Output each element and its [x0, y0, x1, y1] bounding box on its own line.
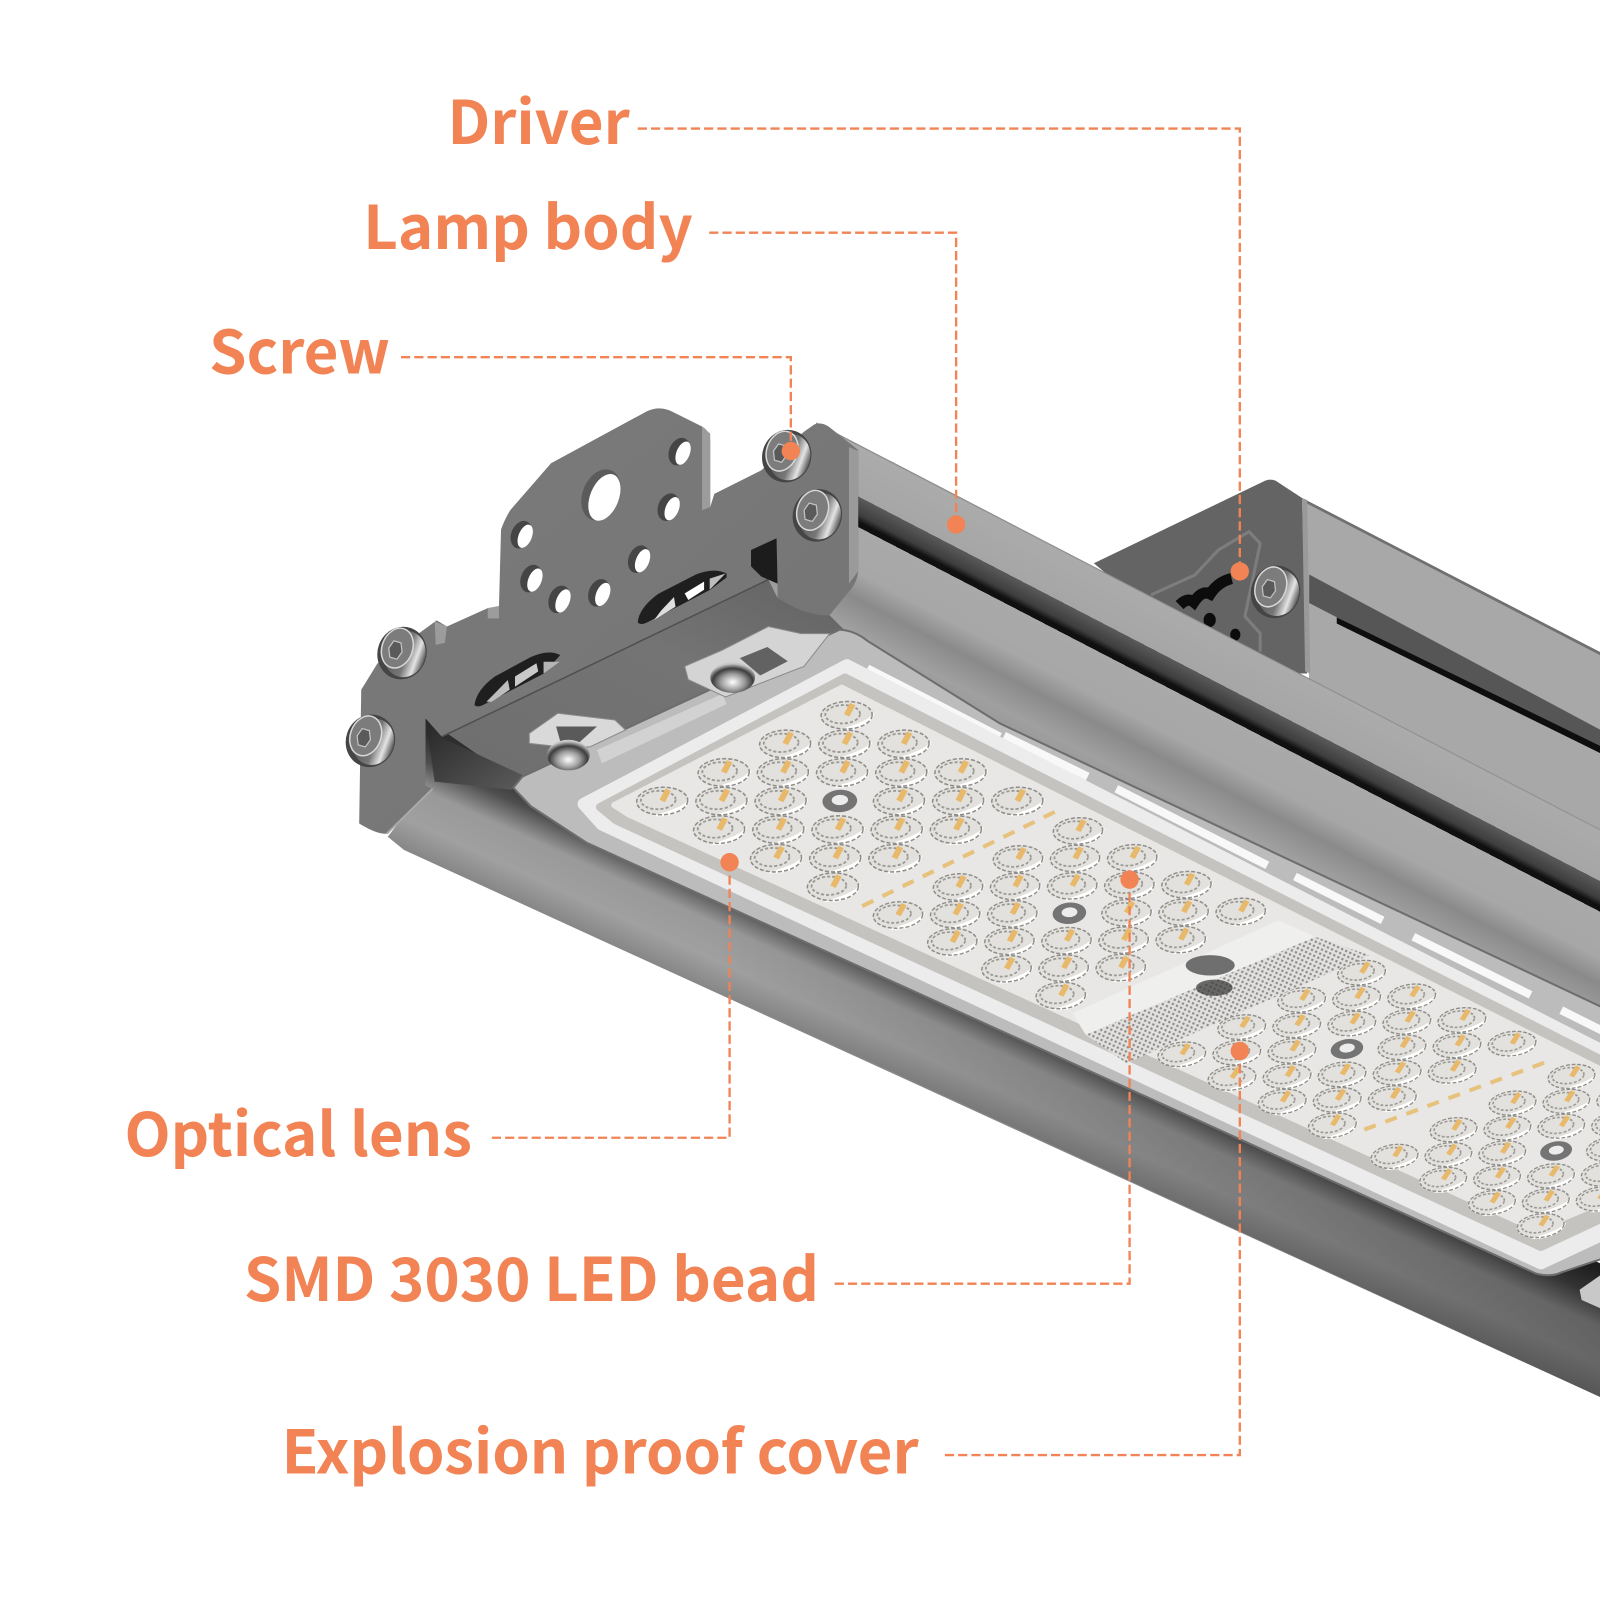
leader: LED bead: [834, 870, 1139, 1284]
leader: screw: [401, 357, 800, 460]
screw lower left: [338, 708, 402, 774]
LED module 4: [1352, 1058, 1600, 1245]
label: SMD 3030 LED bead: SMD 3030 LED bead: [244, 1232, 819, 1319]
right slot: [638, 571, 727, 624]
LED board: [614, 688, 1600, 1230]
left mounting clip: [529, 713, 626, 770]
LED module 1: [628, 701, 1053, 902]
LED module 3: [1140, 954, 1555, 1145]
lens rim: [584, 665, 1600, 1263]
label: driver: Driver: [447, 75, 631, 162]
lamp illustration: [338, 408, 1600, 1431]
large mounting hole: [574, 463, 628, 526]
sensor board section: [1072, 920, 1369, 1063]
label: explosion proof cover: Explosion proof cover: [282, 1404, 920, 1491]
screw upper left: [370, 620, 434, 686]
screw top right: [755, 423, 819, 489]
screw rear unit: [1243, 559, 1308, 625]
driver vents: [1180, 579, 1240, 641]
leader: driver: [638, 129, 1249, 581]
label: lamp body: Lamp body: [363, 180, 693, 267]
bracket notch: [751, 538, 778, 584]
lower body face: [388, 718, 1600, 1431]
screw right: [785, 482, 849, 549]
mounting bracket and end plates: [359, 408, 858, 834]
left slot: [474, 652, 560, 706]
lens inner frame: [600, 678, 1600, 1247]
module seams: [862, 811, 1551, 1130]
rear lamp unit: [1094, 480, 1600, 835]
leader: explosion proof cover: [944, 1042, 1249, 1455]
label: screw: Screw: [209, 304, 390, 391]
LED module 2: [862, 815, 1277, 1012]
label: optical lens: Optical lens: [124, 1087, 472, 1174]
small mounting holes: [507, 435, 694, 616]
explosion proof cover flange: [513, 630, 1600, 1308]
front lamp body upper surfaces: [714, 422, 1600, 1224]
leader: optical lens: [491, 853, 739, 1138]
lamp body underside: [440, 580, 847, 781]
leader: lamp body: [709, 233, 965, 534]
right mounting clip: [685, 627, 830, 697]
